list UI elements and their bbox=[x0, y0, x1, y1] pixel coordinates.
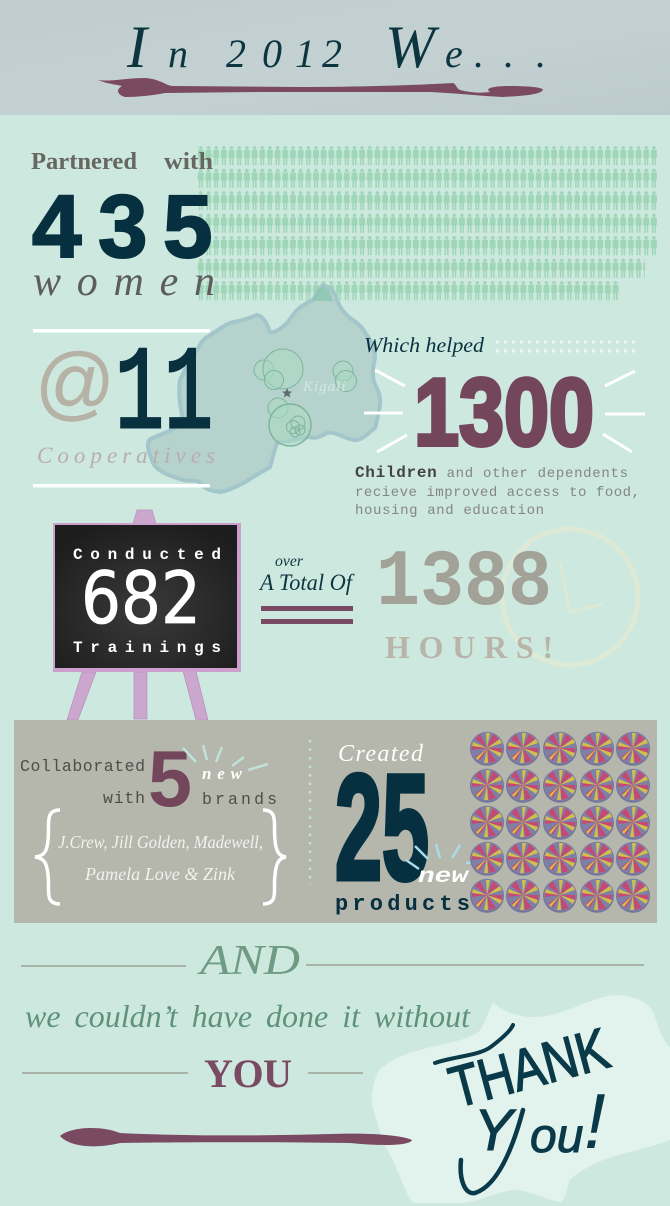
title: n bbox=[168, 31, 198, 76]
collaborated with label: with bbox=[103, 789, 145, 808]
stat: 1388 hours bbox=[376, 538, 553, 665]
women label: women bbox=[33, 259, 215, 305]
new label: new bbox=[202, 764, 243, 783]
you: Y bbox=[474, 1098, 517, 1163]
left brace bbox=[35, 810, 60, 904]
over a total of: over bbox=[275, 553, 304, 570]
product icons grid bbox=[470, 732, 650, 913]
brand names: Pamela Love & Zink bbox=[84, 864, 236, 884]
thank: THANK bbox=[443, 1016, 616, 1121]
thank you lettering bbox=[435, 1016, 616, 1193]
dotted decoration bbox=[496, 342, 640, 351]
Kigali star bbox=[282, 388, 292, 398]
partnered with label: Partnered bbox=[31, 149, 138, 175]
easel legs bbox=[67, 510, 208, 720]
title: 2012 bbox=[226, 31, 352, 76]
number 1388: 1388 bbox=[376, 538, 552, 629]
collaborated with label: Collaborated bbox=[20, 757, 145, 776]
number 1300: 1300 bbox=[414, 359, 594, 466]
number 5: 5 bbox=[148, 734, 192, 823]
board frame bbox=[53, 523, 241, 672]
stat: helped 1300 children bbox=[355, 333, 645, 519]
title: I bbox=[126, 14, 150, 80]
you label: YOU bbox=[204, 1051, 292, 1096]
y tail bbox=[461, 1110, 523, 1193]
products label: products bbox=[335, 892, 470, 917]
brands label: brands bbox=[202, 790, 277, 809]
new label: new bbox=[418, 866, 470, 889]
brand names bbox=[58, 832, 263, 884]
we couldn't have done it without: we couldn’t have done it without bbox=[25, 998, 471, 1034]
clock icon bbox=[502, 529, 638, 665]
title: e bbox=[445, 31, 463, 76]
rays around 1300 bbox=[364, 370, 645, 452]
description: recieve improved access to food, bbox=[355, 485, 640, 501]
over a total of bbox=[258, 553, 355, 624]
brand names: J.Crew, Jill Golden, Madewell, bbox=[58, 832, 263, 852]
easel with chalkboard bbox=[53, 510, 241, 720]
you: ! bbox=[584, 1077, 606, 1165]
pictogram of 435 women bbox=[197, 146, 657, 301]
at symbol: @ bbox=[35, 337, 115, 428]
t swash bbox=[435, 1025, 513, 1063]
number 25: 25 bbox=[335, 743, 429, 911]
Kigali label: Kigali bbox=[302, 379, 347, 395]
right brace bbox=[263, 810, 286, 904]
closing message bbox=[21, 938, 644, 1146]
you: ou bbox=[530, 1110, 583, 1163]
hours label: HOURS! bbox=[385, 629, 553, 665]
rays around 5 bbox=[183, 745, 268, 770]
number 11: 11 bbox=[115, 330, 213, 463]
chalkboard bbox=[55, 525, 237, 668]
panel: brands and products bbox=[14, 720, 657, 923]
collaborated with label bbox=[20, 757, 145, 808]
stat: partnered with 435 women bbox=[31, 149, 215, 305]
trainings label: Trainings bbox=[73, 639, 221, 657]
conducted label: Conducted bbox=[73, 546, 221, 564]
which helped label: Which helped bbox=[364, 333, 485, 357]
description: housing and education bbox=[355, 503, 544, 519]
partnered with label: with bbox=[164, 149, 213, 175]
thank you blob bbox=[372, 995, 670, 1203]
over a total of: A Total Of bbox=[258, 570, 355, 595]
number 682: 682 bbox=[81, 556, 201, 640]
rays around 25 bbox=[406, 844, 483, 869]
title: ... bbox=[474, 31, 546, 76]
description bbox=[355, 464, 640, 519]
created label: Created bbox=[338, 741, 424, 767]
dotted divider bbox=[309, 740, 311, 885]
map of Rwanda bbox=[148, 285, 380, 492]
cooperative location circles bbox=[254, 349, 356, 446]
cooperatives label: Cooperatives bbox=[37, 443, 215, 468]
title brush stroke bbox=[98, 78, 543, 97]
header band bbox=[0, 0, 670, 115]
description: Children and other dependents bbox=[355, 464, 628, 482]
stat: 11 cooperatives bbox=[33, 329, 215, 488]
bottom brush stroke bbox=[60, 1128, 412, 1146]
title: W bbox=[385, 14, 440, 80]
number 435: 435 bbox=[32, 176, 212, 276]
and label: AND bbox=[196, 938, 300, 984]
